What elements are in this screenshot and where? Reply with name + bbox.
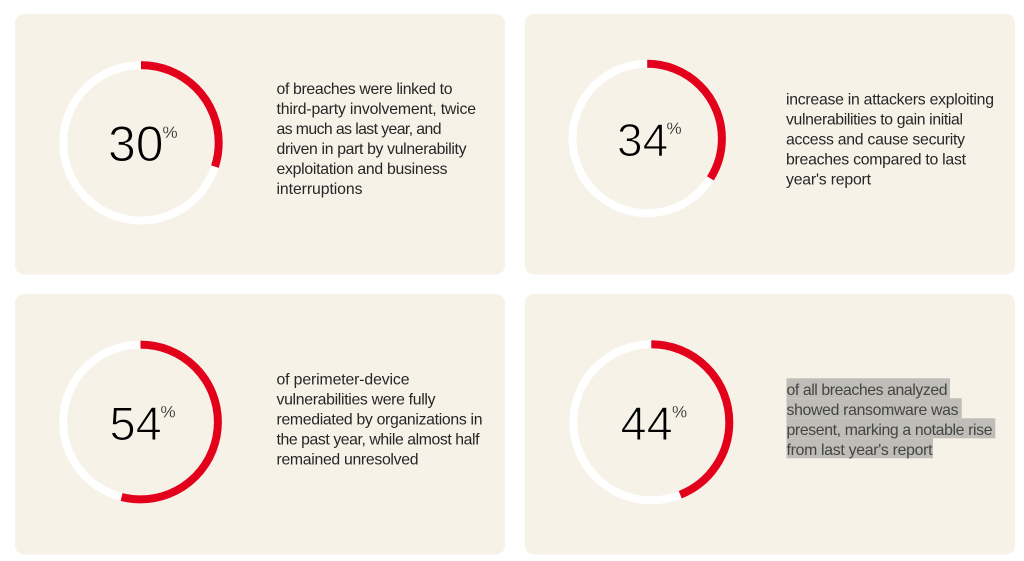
text block: ransomware description with selection highlight: showed ransomware was: [786, 402, 959, 419]
stat value: 44%: 44: [620, 397, 673, 450]
text block: third-party description: of breaches were linked to: [276, 81, 453, 98]
stat value: 30%: 30: [108, 116, 164, 172]
donut chart: 44%: [573, 344, 729, 500]
stat value: 30%: %: [162, 123, 178, 142]
text block: exploitation description: breaches compared to last: [786, 152, 967, 168]
panel: 44% ransomware: [525, 294, 1015, 554]
stat value: 44%: %: [672, 402, 687, 422]
text block: ransomware description with selection highlight: of all breaches analyzed: [786, 382, 948, 399]
text block: remediation description: remediated by organizations in: [276, 412, 482, 428]
text block: exploitation description: year's report: [786, 172, 872, 188]
text block: remediation description: of perimeter-device: [276, 372, 410, 388]
text block: remediation description: [276, 372, 482, 468]
text block: third-party description: [276, 81, 476, 198]
stat value: 54%: %: [160, 402, 176, 422]
text block: third-party description: exploitation and business: [276, 161, 448, 178]
donut chart: 54%: [63, 345, 218, 499]
text block: exploitation description: access and cause security: [786, 132, 965, 148]
text block: third-party description: third-party involvement, twice: [276, 101, 476, 118]
donut chart: 30%: [63, 65, 219, 220]
text block: exploitation description: [786, 92, 994, 188]
text block: ransomware description with selection highlight: present, marking a notable rise: [786, 422, 993, 439]
stat value: 34%: 34: [617, 114, 668, 166]
text block: remediation description: remained unresolved: [276, 452, 418, 468]
text block: ransomware description with selection highlight: from last year's report: [786, 442, 933, 459]
text block: remediation description: the past year, while almost half: [276, 432, 480, 448]
text block: remediation description: vulnerabilities were fully: [276, 392, 436, 408]
stat value: 34%: %: [666, 119, 682, 138]
text block: ransomware description with selection highlight: [786, 378, 995, 459]
text block: third-party description: interruptions: [276, 181, 363, 198]
stat value: 54%: 54: [110, 397, 162, 450]
text block: exploitation description: increase in attackers exploiting: [786, 92, 994, 108]
panel: 30% third-party breaches: [15, 14, 505, 274]
donut chart: 34%: [572, 64, 722, 213]
text block: third-party description: driven in part by vulnerability: [276, 141, 467, 158]
text block: exploitation description: vulnerabilities to gain initial: [786, 112, 963, 128]
text block: third-party description: as much as last year, and: [276, 121, 442, 138]
panel: 54% perimeter-device remediation: [15, 294, 505, 554]
panel: 34% vulnerability exploitation: [525, 14, 1015, 274]
